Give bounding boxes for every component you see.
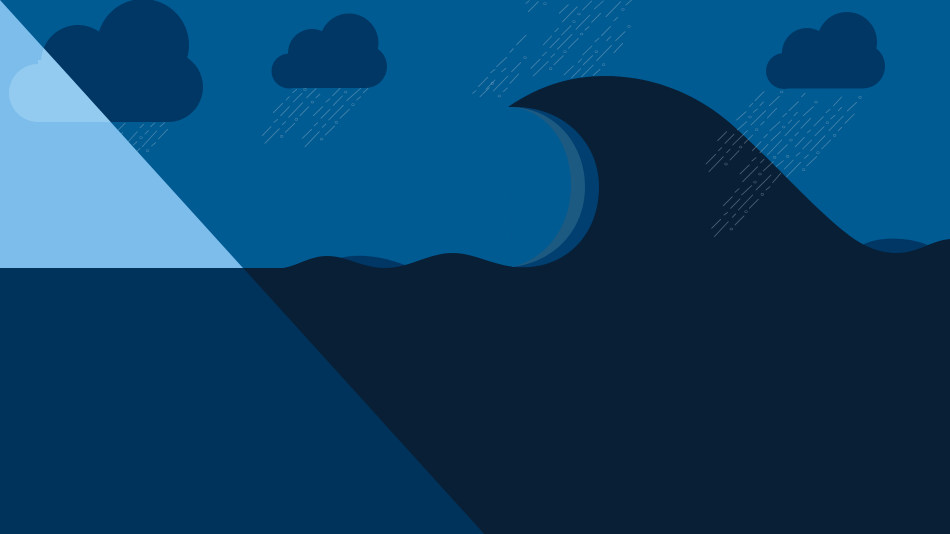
middle crescent <box>508 107 585 267</box>
lower left sea <box>0 268 484 534</box>
wave body <box>243 76 950 534</box>
main breaking wave <box>243 76 950 534</box>
outer crescent <box>508 107 599 267</box>
centre cloud <box>272 14 387 88</box>
inner hollow <box>508 107 571 267</box>
distant wave humps <box>340 239 928 268</box>
rain under centre cloud <box>262 88 368 147</box>
light triangle <box>0 0 243 268</box>
rain above the wave crest <box>473 0 632 97</box>
rain under left cloud <box>115 123 168 157</box>
left cloud lit portion <box>9 48 110 122</box>
left cloud <box>9 0 203 122</box>
rain over the wave <box>706 91 861 237</box>
right cloud <box>766 12 885 89</box>
